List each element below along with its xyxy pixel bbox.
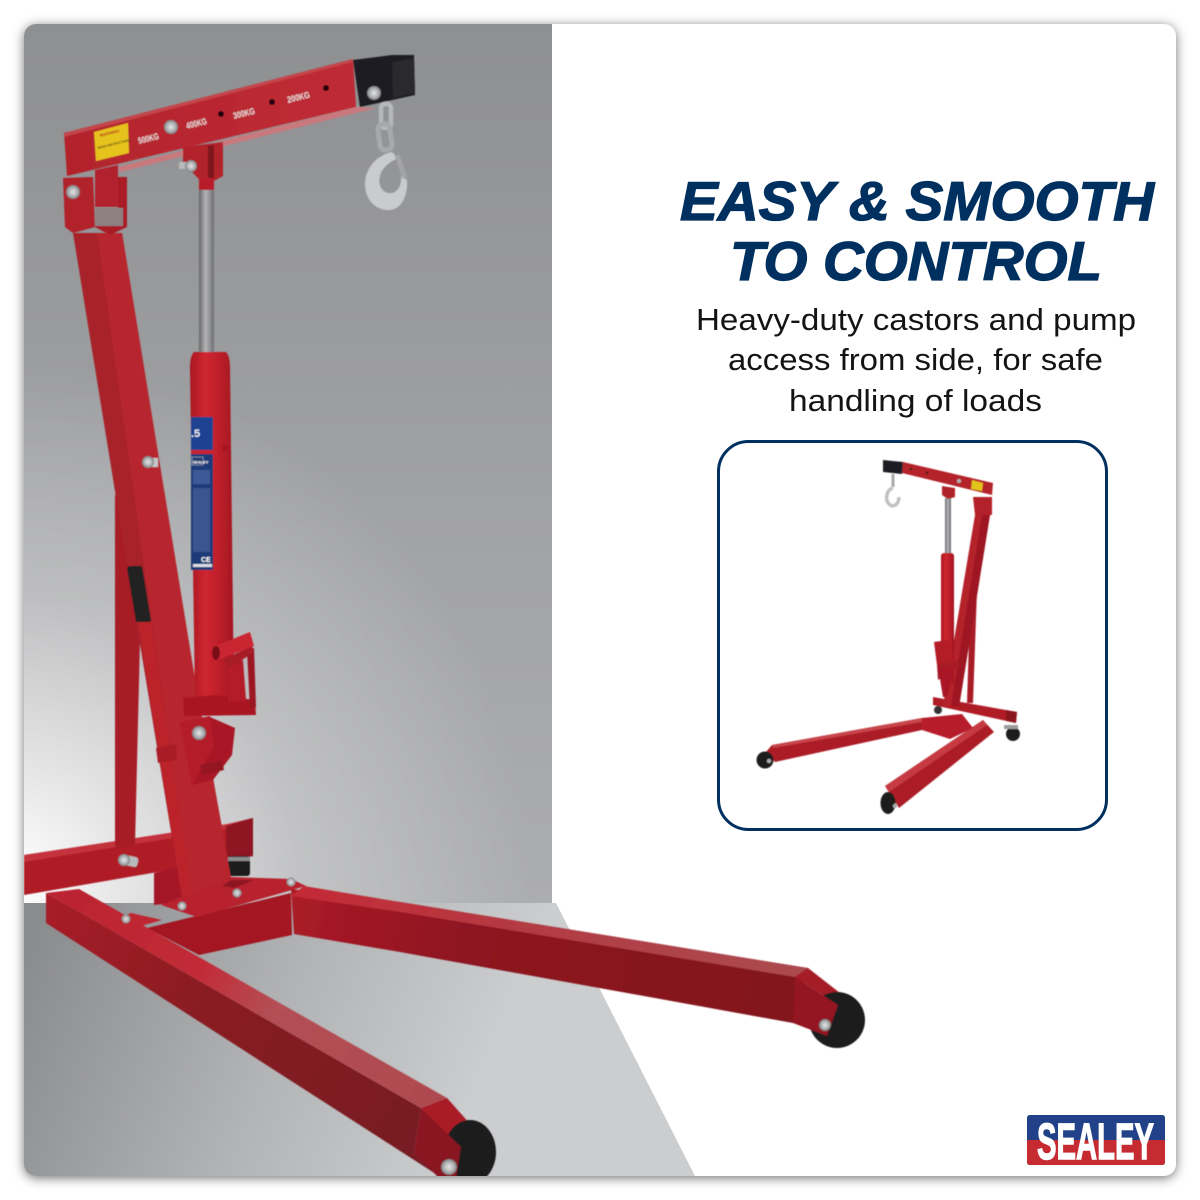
mast centre bolt bbox=[142, 456, 158, 468]
inset crane illustration bbox=[756, 460, 1020, 814]
cylinder clevis bbox=[179, 142, 223, 190]
front cross member bbox=[147, 893, 292, 955]
support strut bbox=[115, 495, 140, 849]
main crane photo illustration bbox=[24, 55, 865, 1184]
heading: easy and smooth to control bbox=[680, 170, 1155, 292]
cylinder nub bbox=[222, 445, 228, 451]
description text: Heavy-duty castors and pump bbox=[696, 303, 1136, 337]
warning label on boom bbox=[94, 123, 131, 161]
cylinder blue specification label: CE bbox=[201, 557, 211, 564]
warning label on boom: READ INSTRUCTIONS bbox=[97, 138, 131, 150]
right leg fork end bbox=[793, 977, 838, 1036]
boom capacity markings: 500KG bbox=[137, 131, 160, 146]
cylinder blue specification label: .5 bbox=[191, 428, 200, 440]
rear castor wheel bbox=[228, 856, 250, 876]
logo blue band bbox=[1027, 1115, 1165, 1141]
boom capacity markings: 400KG bbox=[185, 116, 208, 131]
boom capacity markings bbox=[137, 90, 311, 146]
heading line 2: TO CONTROL bbox=[730, 230, 1102, 292]
cylinder blue specification label: SEALEY bbox=[192, 460, 209, 464]
strut bolt bbox=[118, 854, 139, 868]
left leg fork end bbox=[414, 1108, 461, 1178]
mast pivot bolt bbox=[66, 185, 80, 199]
inset boom bbox=[902, 462, 993, 495]
black handle grip bbox=[127, 566, 151, 622]
boom arm bbox=[64, 59, 356, 176]
mast pivot bracket bbox=[180, 716, 235, 785]
heading line 1: EASY & SMOOTH bbox=[680, 170, 1155, 232]
boom capacity markings: 200KG bbox=[286, 90, 311, 105]
SEALEY logo bbox=[1027, 1113, 1165, 1170]
inset black boom end bbox=[883, 460, 903, 474]
inset mast bbox=[943, 515, 990, 707]
lifting hook and chain bbox=[365, 104, 407, 210]
inset front right leg bbox=[885, 720, 994, 808]
base mounting plates bbox=[111, 877, 306, 928]
handle tube bbox=[138, 620, 193, 904]
description text: handling of loads bbox=[789, 384, 1042, 418]
right leg bbox=[291, 886, 840, 1023]
hydraulic pump unit bbox=[183, 632, 256, 716]
front castor bolt bbox=[441, 1159, 457, 1175]
left leg bbox=[46, 889, 487, 1176]
inset pivot bracket bbox=[938, 667, 953, 697]
inset collar bbox=[973, 497, 992, 515]
cylinder blue specification label bbox=[191, 417, 213, 570]
hydraulic cylinder bbox=[190, 352, 234, 700]
mast column bbox=[73, 233, 235, 904]
backdrop wall bbox=[24, 24, 552, 904]
rear cross bar bbox=[24, 818, 253, 895]
logo red band bbox=[1027, 1140, 1165, 1165]
description text bbox=[696, 303, 1136, 418]
wall lower-left light glow bbox=[24, 434, 446, 903]
boom holes and bolt bbox=[164, 85, 329, 134]
warning label on boom: WARNING bbox=[99, 128, 120, 138]
handle collar bbox=[156, 744, 177, 763]
base post block bbox=[153, 868, 182, 906]
inset support strut bbox=[967, 590, 977, 703]
right castor bolt bbox=[819, 1019, 831, 1031]
backdrop floor bbox=[24, 903, 695, 1176]
boom lower lip bbox=[118, 107, 376, 172]
inset clevis bbox=[942, 486, 955, 499]
mast top collar bbox=[63, 165, 127, 235]
description text: access from side, for safe bbox=[728, 343, 1103, 377]
inset rear castors bbox=[934, 706, 1020, 741]
inset left leg bbox=[766, 718, 922, 762]
inset rear cross bar bbox=[933, 697, 1017, 723]
right castor wheel bbox=[809, 992, 865, 1048]
inset pump bbox=[934, 640, 960, 680]
photo panel: grey studio backdrop bbox=[24, 24, 695, 1176]
inset front wheel bbox=[880, 792, 897, 814]
inset hydraulic cylinder bbox=[941, 553, 954, 685]
boom capacity markings: 300KG bbox=[232, 106, 256, 121]
hydraulic piston rod bbox=[199, 188, 214, 354]
inset piston rod bbox=[945, 498, 951, 553]
front castor wheel bbox=[444, 1120, 496, 1184]
black boom extension end bbox=[353, 55, 415, 107]
inset base plate bbox=[922, 714, 973, 739]
inset frame bbox=[718, 442, 1106, 830]
inset left wheel bbox=[756, 752, 774, 768]
inset panel: full crane bbox=[718, 442, 1106, 830]
inset lifting hook bbox=[887, 474, 899, 506]
